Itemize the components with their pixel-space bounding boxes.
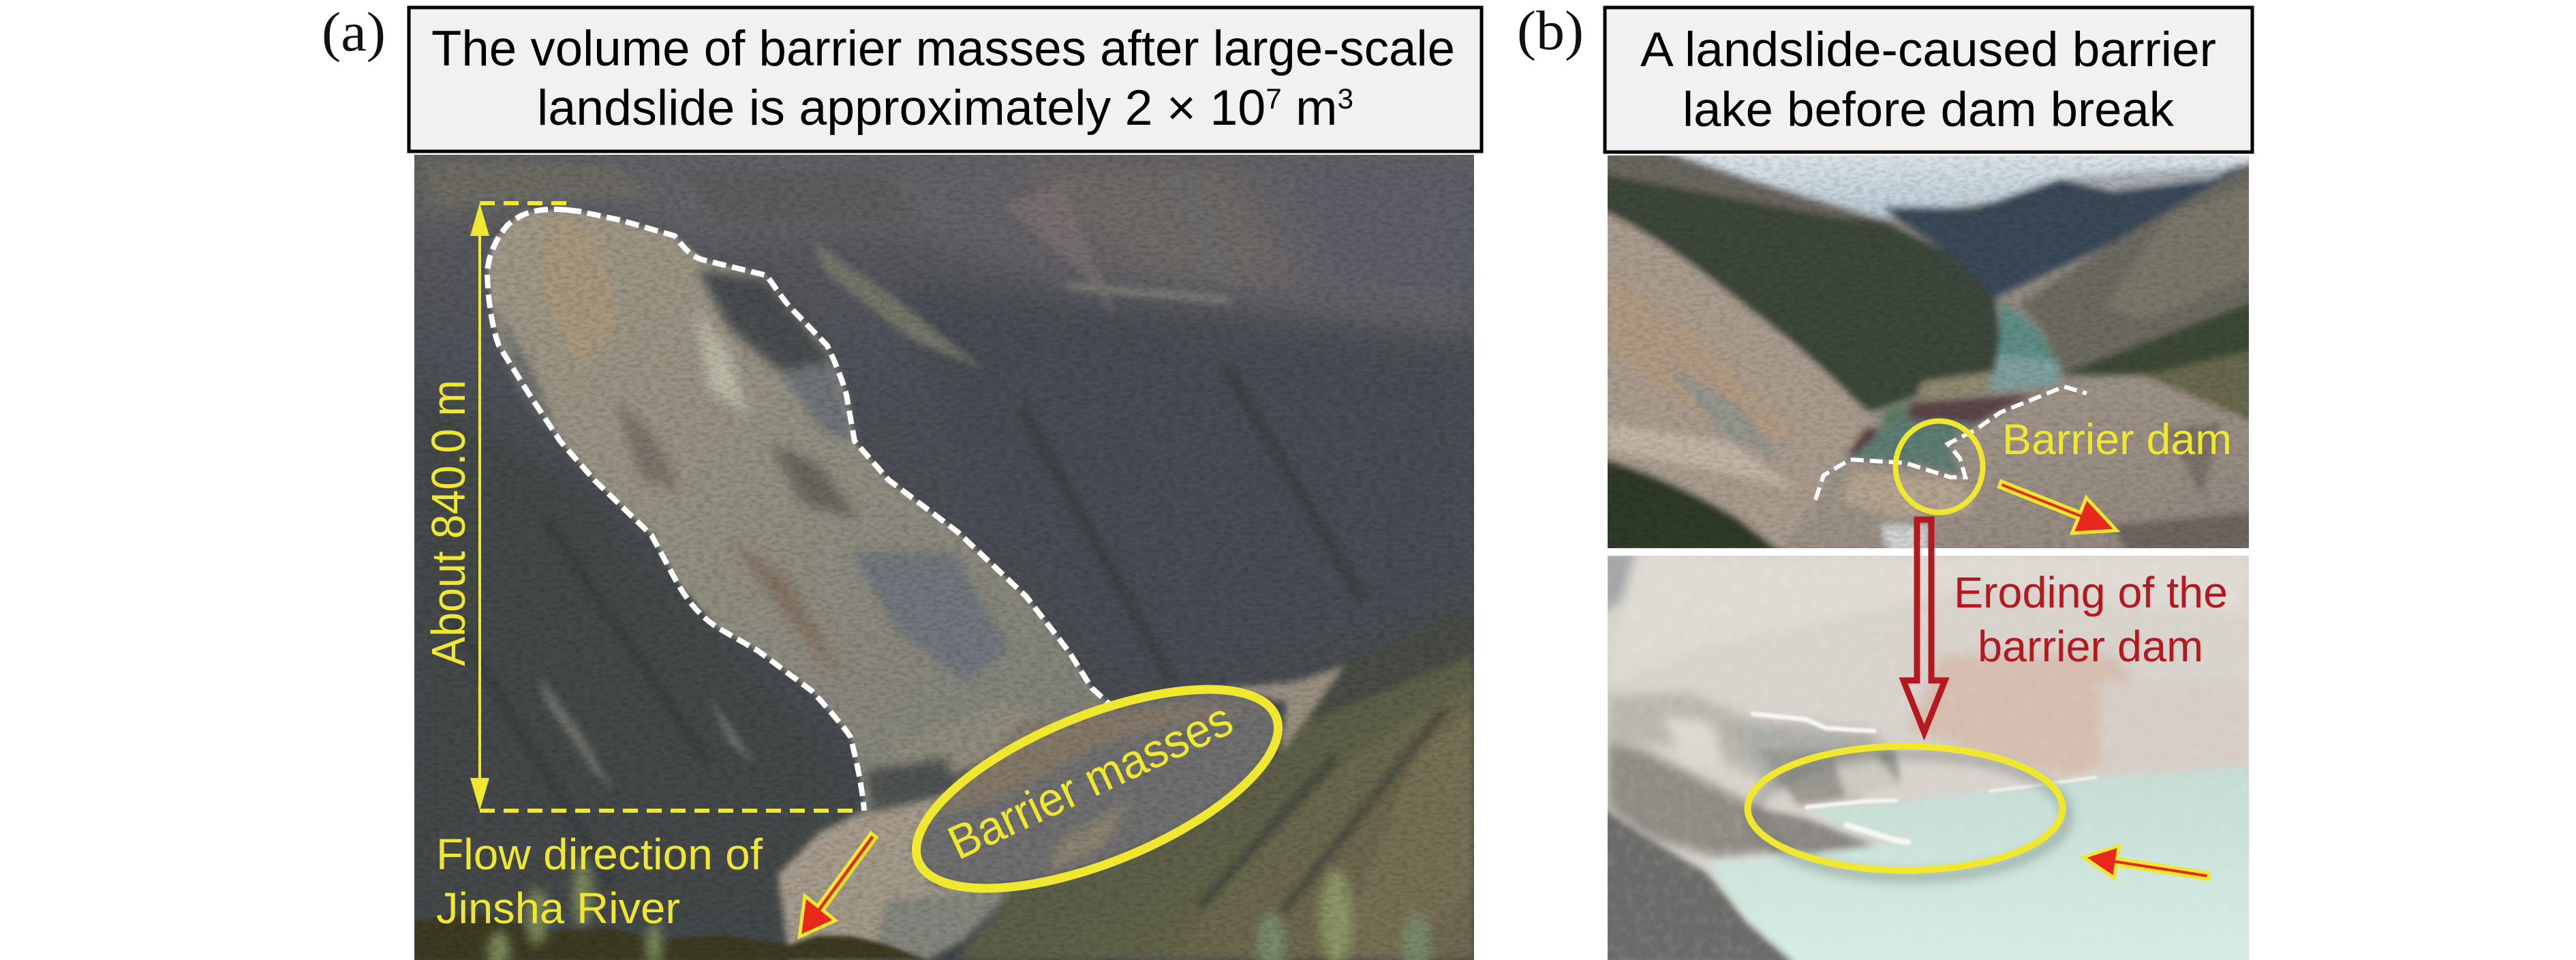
label: eroding of the barrier dam: barrier dam — [1978, 622, 2203, 671]
label: flow direction of Jinsha River: Flow direction of — [436, 830, 763, 879]
title box (b): A landslide-caused barrier — [1640, 23, 2216, 77]
forest streaks — [450, 368, 1445, 914]
title box (b): lake before dam break — [1683, 83, 2175, 137]
title box (a): landslide is approximately 2 × 10 — [537, 80, 1260, 136]
height dimension arrow — [470, 203, 853, 811]
label: eroding of the barrier dam: Eroding of the — [1954, 568, 2228, 617]
title box (a): m — [1282, 80, 1337, 136]
panel label: (b): (b) — [1517, 0, 1584, 61]
photo: landslide on Jinsha River — [414, 155, 1474, 960]
arrow: river flow — [799, 833, 876, 937]
title box (a): 7 — [1266, 82, 1282, 115]
label: about 840.0 m: About 840.0 m — [422, 380, 475, 666]
label: flow direction of Jinsha River: Jinsha River — [436, 884, 680, 933]
label: flow direction of Jinsha River — [436, 830, 763, 933]
arrow: water flow — [2083, 845, 2209, 880]
barrier masses deposit inside ellipse — [921, 694, 1274, 884]
landslide dam boundary: white dashed — [1815, 387, 2087, 500]
barrier dam circle — [1896, 421, 1983, 513]
title box (a) — [409, 7, 1482, 151]
landslide outline: white dashed — [487, 209, 1114, 811]
panel label: (a): (a) — [322, 1, 386, 63]
label: barrier masses: Barrier masses — [940, 692, 1240, 870]
label: eroding of the barrier dam — [1954, 568, 2228, 671]
title box (a): 3 — [1337, 82, 1353, 115]
arrow: downstream flow — [1999, 481, 2117, 533]
hollow arrow: eroding — [1903, 520, 1945, 732]
label: barrier dam: Barrier dam — [2002, 416, 2232, 464]
title box (a): The volume of barrier masses after large-scale — [431, 21, 1455, 76]
landslide body — [487, 210, 1114, 811]
eroded section ellipse — [1747, 746, 2067, 877]
photo: barrier lake before break — [1601, 150, 2256, 552]
foreground bush and sprouts — [414, 859, 1430, 960]
title box (b) — [1605, 7, 2252, 152]
barrier masses ellipse — [891, 648, 1304, 929]
photo: eroding close-up — [1601, 552, 2256, 960]
